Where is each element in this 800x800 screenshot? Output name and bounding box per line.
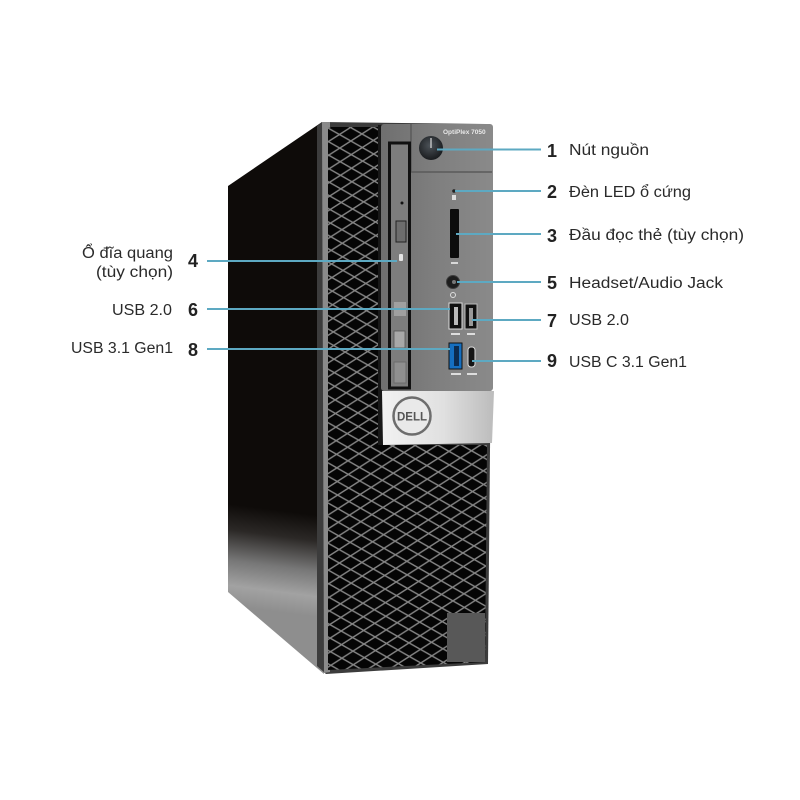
bottom square plate	[447, 613, 485, 662]
drive LED	[399, 254, 403, 261]
callout 3: Đầu đọc thẻ (tùy chọn)	[569, 227, 744, 244]
callout 5	[547, 273, 723, 293]
callout 1	[547, 141, 649, 161]
callout 5: 5	[547, 273, 557, 293]
callout 3	[547, 226, 744, 246]
callout 6: USB 2.0	[112, 302, 172, 319]
eject button	[396, 221, 406, 242]
side panel	[228, 122, 324, 674]
USB 2.0 port left	[449, 303, 462, 335]
USB 2.0 port right	[465, 304, 477, 335]
audio jack	[446, 276, 460, 298]
frame edge	[322, 122, 330, 673]
callout 4: Ổ đĩa quang	[82, 244, 173, 262]
callout 2: Đèn LED ổ cứng	[569, 184, 691, 201]
power button	[419, 136, 443, 160]
callout 4: (tùy chọn)	[96, 264, 173, 281]
USB-C port	[467, 347, 477, 375]
computer tower	[228, 122, 494, 674]
callout line 7	[472, 319, 541, 321]
drive logos	[394, 302, 406, 316]
upper grille	[328, 127, 378, 449]
callout 4: 4	[188, 251, 198, 271]
callout 2	[547, 182, 691, 202]
callout line 3	[456, 233, 541, 235]
callout 8: 8	[188, 340, 198, 360]
callout line 9	[472, 360, 541, 362]
callout 6: 6	[188, 300, 198, 320]
lower grille	[328, 445, 487, 670]
callout line 6	[207, 308, 450, 310]
Dell logo: DELL	[397, 412, 427, 424]
callout line 4	[207, 260, 397, 262]
callout 5: Headset/Audio Jack	[569, 275, 723, 292]
callout line 1	[437, 148, 541, 150]
silver plate	[382, 391, 494, 445]
hard drive LED	[452, 189, 456, 200]
model name: OptiPlex 7050	[443, 129, 486, 136]
drive hole	[400, 202, 404, 204]
callout 7: 7	[547, 311, 557, 331]
callout 8: USB 3.1 Gen1	[71, 340, 173, 357]
callout 3: 3	[547, 226, 557, 246]
power section divider	[411, 124, 492, 172]
callout 9: USB C 3.1 Gen1	[569, 354, 687, 371]
Dell logo	[394, 398, 430, 434]
callout line 5	[457, 281, 541, 283]
divider strip	[378, 125, 383, 445]
callout 1: Nút nguồn	[569, 142, 649, 159]
callout 7	[547, 311, 629, 331]
front frame	[317, 122, 493, 674]
USB 3.1 port	[449, 343, 462, 375]
callout line 2	[455, 190, 541, 192]
callout 2: 2	[547, 182, 557, 202]
optical drive bay	[390, 143, 410, 388]
callout 9: 9	[547, 351, 557, 371]
callout line 8	[207, 348, 450, 350]
card reader	[450, 209, 459, 264]
callout 8	[71, 340, 198, 360]
callout 4	[82, 244, 198, 281]
callout 7: USB 2.0	[569, 312, 629, 329]
front panel	[381, 124, 493, 391]
callout 1: 1	[547, 141, 557, 161]
callout 6	[112, 300, 198, 320]
